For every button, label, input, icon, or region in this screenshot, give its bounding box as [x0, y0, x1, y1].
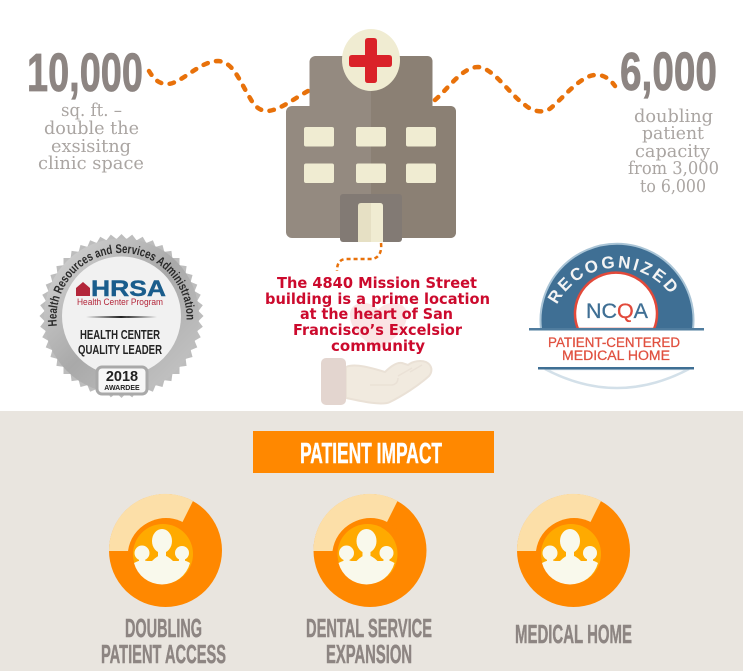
- serrated edge: [39, 234, 204, 398]
- stat: 10,000 sq. ft.: 10,000: [27, 43, 143, 103]
- stat: 6,000 patients: capacity: [635, 141, 711, 162]
- stat: 6,000 patients: doubling: [634, 106, 713, 127]
- arrow: dashed line right: [435, 67, 615, 111]
- badge: HRSA quality leader: 2018: [106, 369, 138, 385]
- badge: HRSA quality leader: Health Resources and Services Administration: [48, 244, 195, 326]
- caption: location description: [265, 274, 490, 355]
- badge: HRSA quality leader: Health Center Program: [77, 297, 163, 307]
- badge: NCQA recognized: [529, 242, 704, 390]
- heading: patient impact: [253, 431, 494, 473]
- item: dental service expansion: DENTAL SERVICE: [306, 613, 432, 643]
- icon: heart behind caption: [350, 303, 407, 350]
- stat: 10,000 sq. ft.: exsisitng: [51, 136, 131, 157]
- stat: 6,000 patients: patient: [642, 123, 705, 144]
- badge: NCQA recognized: RECOGNIZED: [548, 256, 677, 304]
- badge: NCQA recognized: MEDICAL HOME: [562, 348, 670, 363]
- item: dental service expansion: [306, 494, 432, 669]
- stat: 10,000 sq. ft.: double the: [44, 118, 139, 139]
- panel: patient impact: [0, 411, 743, 671]
- icon: HRSA house: [76, 282, 90, 296]
- arrow: dashed line from door to caption: [337, 243, 381, 271]
- badge: HRSA quality leader: AWARDEE: [104, 385, 140, 392]
- badge: HRSA quality leader: QUALITY LEADER: [78, 343, 162, 357]
- caption: location description: at the heart of San: [300, 305, 453, 323]
- item: doubling patient access: [101, 494, 226, 669]
- stat: 10,000 sq. ft.: clinic space: [38, 153, 144, 174]
- caption: location description: building is a prime location: [265, 290, 490, 308]
- stat: 6,000 patients: from 3,000: [628, 158, 719, 179]
- item: dental service expansion: EXPANSION: [326, 639, 412, 669]
- stat: 6,000 patients: to 6,000: [640, 176, 706, 197]
- heading: patient impact: PATIENT IMPACT: [300, 438, 442, 470]
- item: doubling patient access: DOUBLING: [125, 613, 202, 643]
- caption: location description: Francisco’s Excelsior: [293, 321, 462, 339]
- item: doubling patient access: PATIENT ACCESS: [101, 639, 226, 669]
- item: medical home: MEDICAL HOME: [515, 619, 632, 649]
- badge: HRSA quality leader: HRSA: [91, 276, 166, 301]
- badge: HRSA quality leader: [40, 234, 204, 398]
- stat: 6,000 patients: [620, 42, 719, 197]
- caption: location description: community: [331, 337, 425, 355]
- icon: open hand: [321, 358, 431, 405]
- badge: HRSA quality leader: HEALTH CENTER: [80, 328, 160, 342]
- caption: location description: The 4840 Mission Street: [277, 274, 478, 292]
- badge: NCQA recognized: PATIENT-CENTERED: [548, 335, 680, 350]
- item: medical home: [515, 494, 632, 649]
- badge: NCQA recognized: NCQA: [586, 300, 648, 323]
- arrow: dashed line left: [149, 61, 308, 111]
- icon: hospital building: [286, 29, 456, 242]
- stat: 10,000 sq. ft.: sq. ft. –: [61, 100, 122, 121]
- stat: 10,000 sq. ft.: [27, 43, 144, 174]
